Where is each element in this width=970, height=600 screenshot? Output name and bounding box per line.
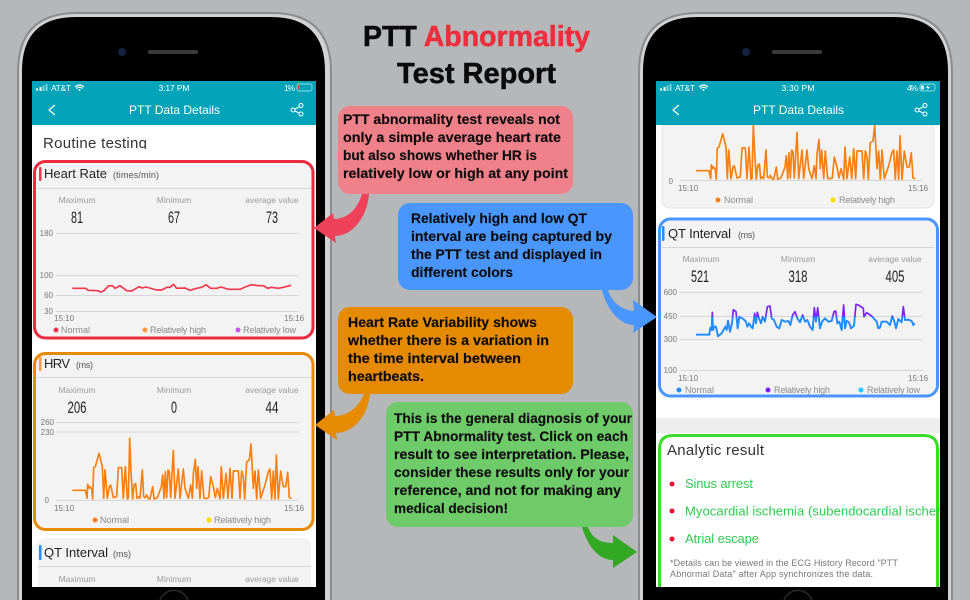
stats: heart rate: 81 (71, 208, 83, 227)
phone: left (17, 12, 332, 600)
panel: QT interval card, partly visible: Maximum (59, 574, 95, 584)
stats: HRV: average value (245, 385, 299, 395)
panel: HRV card (34, 354, 313, 530)
callout: heart rate variability: whether there is a variation in (347, 332, 549, 348)
callout: QT interval: different colors (411, 264, 513, 280)
stats: QT interval: 405 (886, 267, 904, 286)
callout: heart rate: but also shows whether HR is (343, 147, 537, 163)
panel: QT interval card, partly visible (38, 538, 311, 587)
panel: QT interval card, right phone (660, 219, 938, 396)
arrow: green to analytic result (582, 527, 637, 568)
right top chart card: HRV continued: 15:16 (908, 184, 929, 193)
chart: HRV line: 15:10 (54, 504, 75, 513)
right app header: PTT Data Details (753, 103, 844, 117)
callout: general diagnosis: reference, and not for making any (394, 482, 621, 498)
chart: HRV line: 15:16 (284, 504, 305, 513)
panel: heart rate card: Heart Rate (44, 166, 107, 181)
right app header (656, 81, 940, 125)
legend: right HRV: Relatively high (839, 195, 895, 205)
callout: heart rate (338, 106, 573, 194)
list: diagnosis results: Atrial escape (685, 531, 759, 546)
phone bottom bezels and home buttons (22, 587, 948, 600)
callout: heart rate variability (338, 307, 573, 394)
chart: heart rate line: 60 (44, 291, 54, 300)
stats: QT interval (683, 254, 922, 286)
panel: HRV card: (ms) (76, 360, 93, 370)
stats: QT interval: 521 (691, 267, 709, 286)
stats: QT interval: average value (868, 254, 922, 264)
legend: heart rate: Relatively high (150, 325, 206, 335)
panel: heart rate card: (times/min) (113, 170, 159, 180)
callout: general diagnosis: PTT Abnormality test. Click on each (394, 428, 628, 444)
chart: QT interval line: 15:10 (678, 374, 699, 383)
panel: HRV card: HRV (44, 356, 70, 371)
panel: QT interval card, right phone: QT Interval (668, 226, 731, 241)
chart: QT interval line: 600 (664, 288, 678, 297)
callout: heart rate variability: heartbeats. (348, 368, 424, 384)
list: diagnosis results: Myocardial ischemia (subendocardial ischem (685, 504, 947, 518)
note: details (670, 558, 898, 579)
stats: QT interval: 318 (788, 267, 808, 286)
callout: general diagnosis: medical decision! (394, 500, 508, 516)
chart: heart rate line: 15:16 (284, 314, 305, 323)
right top chart card: HRV continued: 15:10 (678, 184, 699, 193)
stats: HRV: Minimum (157, 385, 191, 395)
stats: heart rate: average value (245, 195, 299, 205)
stats: HRV: Maximum (59, 385, 95, 395)
left app header (32, 81, 316, 125)
callout: general diagnosis: consider these results only for your (394, 464, 630, 480)
title: PTT Abnormality (363, 21, 590, 53)
chart: heart rate line: 15:10 (54, 314, 75, 323)
panel: QT interval card, right phone: (ms) (738, 230, 755, 240)
note: details: Abnormal Data" after App synchronizes the data. (670, 569, 873, 579)
callout: general diagnosis (386, 402, 633, 527)
chart: QT interval line (664, 288, 929, 383)
stats: QT interval: Maximum (683, 254, 719, 264)
left app header: 3:17 PM (158, 83, 190, 93)
chart: heart rate line (40, 229, 305, 323)
list: diagnosis results: Sinus arrest (685, 476, 753, 491)
chart: QT interval line: 100 (664, 366, 678, 375)
chart: HRV line (41, 418, 305, 513)
legend: right HRV: Normal (724, 195, 753, 205)
title (363, 21, 590, 90)
chart: HRV line: 230 (41, 428, 55, 437)
legend: QT interval: Relatively high (774, 385, 830, 395)
left app header: PTT Data Details (129, 103, 220, 117)
legend: QT interval (676, 385, 920, 395)
chart: HRV line: 260 (41, 418, 55, 427)
stats: HRV: 0 (171, 398, 177, 417)
phone: right (638, 12, 953, 600)
chart: HRV line: 0 (45, 496, 50, 505)
callout: QT interval: the PTT test and displayed in (411, 246, 602, 262)
callout: heart rate variability: the time interval between (348, 350, 521, 366)
left app header: 1% (284, 83, 295, 93)
stats: HRV (59, 385, 299, 417)
panel: analytic result (656, 418, 947, 587)
stats: QT interval: Minimum (781, 254, 815, 264)
stats: heart rate (59, 195, 299, 227)
chart: heart rate line: 30 (44, 307, 54, 316)
right app header: 3:30 PM (782, 83, 814, 93)
stats: HRV: 44 (266, 398, 278, 417)
arrow: orange to HRV card (315, 394, 370, 440)
legend: heart rate: Normal (61, 325, 90, 335)
panel: QT interval card, partly visible: QT Interval (44, 545, 108, 560)
right app header: 4% (907, 83, 918, 93)
legend: QT interval: Relatively low (867, 385, 920, 395)
callout: QT interval: interval are being captured by (411, 228, 612, 244)
callout: heart rate: only a simple average heart rate (343, 129, 561, 145)
callout: heart rate: PTT abnormality test reveals not (343, 111, 560, 127)
legend: heart rate (54, 325, 296, 335)
stats: heart rate: 73 (266, 208, 278, 227)
stats: heart rate: 67 (168, 208, 180, 227)
list: diagnosis results (670, 476, 947, 546)
legend: QT interval: Normal (685, 385, 714, 395)
chart: heart rate line: 180 (40, 229, 54, 238)
callout: heart rate: relatively low or high at any point (343, 165, 568, 181)
panel: QT interval card, partly visible: (ms) (113, 549, 131, 559)
callout: general diagnosis: result to see interpretation. Please, (394, 446, 629, 462)
arrow: red to heart rate card (314, 194, 369, 243)
title: Test Report (397, 58, 556, 90)
panel: analytic result: Analytic result (667, 442, 765, 459)
legend: HRV: Normal (100, 515, 129, 525)
panel: heart rate card (34, 162, 313, 338)
right app header: AT&T (675, 83, 695, 93)
stats: HRV: 206 (68, 398, 86, 417)
right top chart card: HRV continued (662, 125, 934, 208)
callout: general diagnosis: This is the general diagnosis of your (394, 410, 633, 426)
chart: QT interval line: 15:16 (908, 374, 929, 383)
chart: QT interval line: 450 (664, 312, 678, 321)
callout: QT interval (398, 203, 633, 290)
legend: HRV: Relatively high (214, 515, 271, 525)
legend: heart rate: Relatively low (243, 325, 296, 335)
chart: QT interval line: 300 (664, 335, 678, 344)
callout: QT interval: Relatively high and low QT (411, 210, 587, 226)
arrow: blue to QT card (602, 290, 657, 333)
note: details: *Details can be viewed in the ECG History Record "PTT (670, 558, 898, 568)
callout: heart rate variability: Heart Rate Variability shows (348, 314, 537, 330)
panel: QT interval card, partly visible: Minimum (157, 574, 191, 584)
stats: heart rate: Maximum (59, 195, 95, 205)
right top chart card: HRV continued: 0 (669, 177, 674, 186)
chart: heart rate line: 100 (40, 271, 54, 280)
left app header: AT&T (51, 83, 71, 93)
legend: HRV (92, 515, 271, 525)
heading: routine testing: Routine testing (43, 135, 147, 152)
panel: QT interval card, partly visible: average value (245, 574, 299, 584)
stats: heart rate: Minimum (157, 195, 191, 205)
legend: right HRV (716, 195, 895, 205)
